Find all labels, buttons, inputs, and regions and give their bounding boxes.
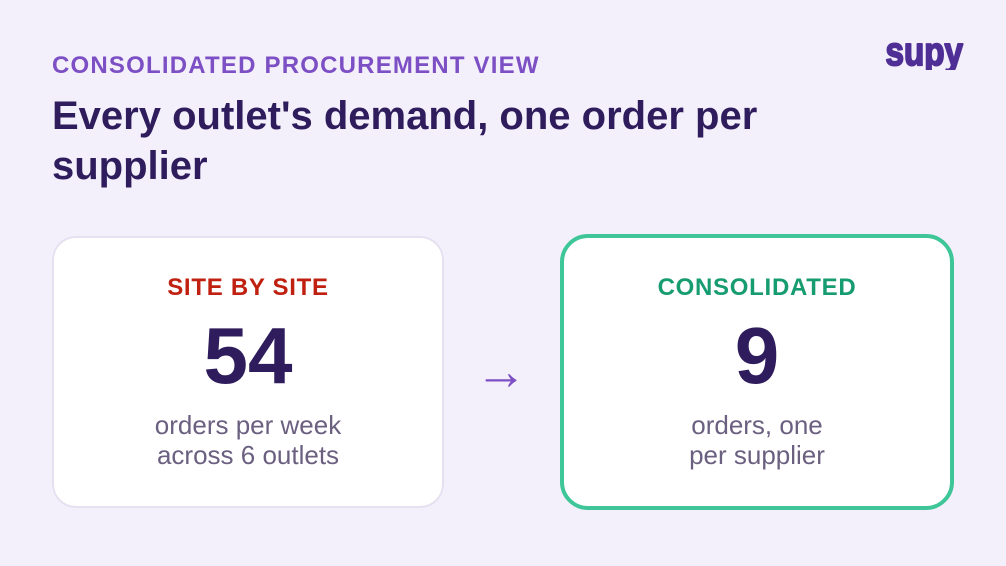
number: 54 orders: 54: [204, 311, 292, 400]
description: orders per week: [155, 410, 342, 470]
description: orders per week: orders per week: [155, 410, 341, 440]
panel: consolidated: [560, 234, 954, 510]
description: orders per week: across 6 outlets: [157, 440, 339, 470]
panel: site by site: [52, 236, 444, 508]
arrow: →: [475, 343, 527, 401]
description: orders per supplier: orders, one: [691, 410, 823, 440]
main title: Every outlet's demand, one order per supplier: [52, 94, 757, 188]
description: orders per supplier: [689, 410, 825, 470]
number: 9 orders: 9: [735, 311, 779, 400]
description: orders per supplier: per supplier: [689, 440, 825, 470]
label: consolidated: CONSOLIDATED: [658, 274, 856, 301]
eyebrow heading: CONSOLIDATED PROCUREMENT VIEW: [52, 52, 540, 79]
label: site by site: SITE BY SITE: [167, 274, 329, 301]
